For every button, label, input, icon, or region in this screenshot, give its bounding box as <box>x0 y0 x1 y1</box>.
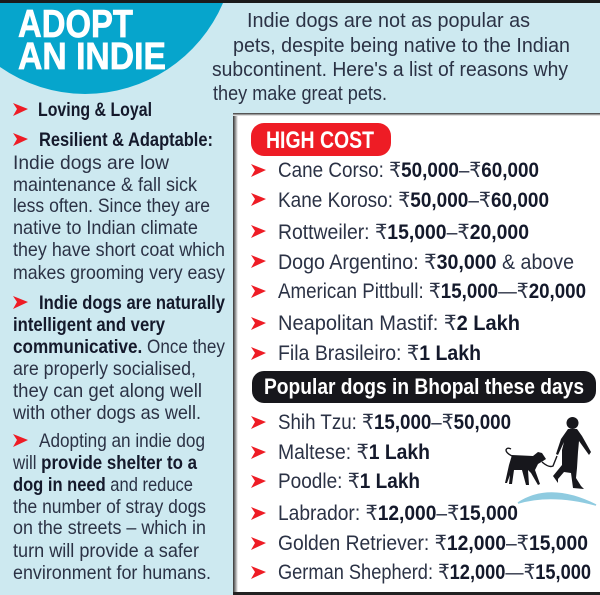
reason: shelter and safer streets: environment for humans. <box>13 562 211 584</box>
reason: intelligent and communicative: communicative. Once they <box>13 336 225 358</box>
intro text: Indie dogs are not as popular as <box>247 9 530 32</box>
reason: shelter and safer streets: the number of stray dogs <box>13 496 206 518</box>
item: american pittbull: American Pittbull: ₹15,000—₹20,000 <box>278 280 586 303</box>
reason: shelter and safer streets: dog in need and reduce <box>13 474 193 496</box>
item: golden retriever: Golden Retriever: ₹12,000–₹15,000 <box>278 532 588 555</box>
title badge: ADOPT <box>18 3 133 46</box>
title badge: AN INDIE <box>18 36 166 78</box>
reason: resilient and adaptable <box>13 129 225 284</box>
reason: loving and loyal: Loving & Loyal <box>38 99 152 121</box>
panel: dog prices <box>233 113 600 595</box>
reason: resilient and adaptable: less often. Since they are <box>13 195 210 217</box>
reason: shelter and safer streets: on the streets – which in <box>13 517 206 539</box>
reason: resilient and adaptable: they have short coat which <box>13 239 225 261</box>
item: shih tzu: Shih Tzu: ₹15,000–₹50,000 <box>278 411 511 434</box>
intro text: pets, despite being native to the Indian <box>233 34 570 57</box>
intro text: they make great pets. <box>213 82 387 105</box>
item: maltese: Maltese: ₹1 Lakh <box>278 441 430 464</box>
reason: loving and loyal <box>13 99 152 121</box>
item: fila brasileiro: Fila Brasileiro: ₹1 Lakh <box>278 342 481 365</box>
reason: resilient and adaptable: makes grooming very easy <box>13 262 225 284</box>
reason: intelligent and communicative: Indie dogs are naturally <box>39 292 225 314</box>
title badge <box>0 3 223 94</box>
reason: shelter and safer streets: Adopting an indie dog <box>39 430 205 452</box>
item: cane corso: Cane Corso: ₹50,000–₹60,000 <box>278 159 539 182</box>
heading: high cost <box>251 123 391 156</box>
item: rottweiler: Rottweiler: ₹15,000–₹20,000 <box>278 221 529 244</box>
item: poodle: Poodle: ₹1 Lakh <box>278 470 420 493</box>
reason: resilient and adaptable: Resilient & Adaptable: <box>39 129 213 151</box>
reason: resilient and adaptable: Indie dogs are low <box>13 152 170 174</box>
item: dogo argentino: Dogo Argentino: ₹30,000 & above <box>278 251 574 274</box>
reason: resilient and adaptable: maintenance & fall sick <box>13 174 197 196</box>
heading: high cost: HIGH COST <box>266 127 374 154</box>
reason: intelligent and communicative: intelligent and very <box>13 314 165 336</box>
reason: shelter and safer streets <box>12 430 211 584</box>
item: labrador: Labrador: ₹12,000–₹15,000 <box>278 502 518 525</box>
intro text: subcontinent. Here's a list of reasons why <box>212 58 569 81</box>
reason: intelligent and communicative <box>12 292 225 424</box>
intro text <box>212 9 570 105</box>
item: kane koroso: Kane Koroso: ₹50,000–₹60,000 <box>278 189 549 212</box>
reason: intelligent and communicative: are properly socialised, <box>13 358 196 380</box>
icon: person walking dog <box>505 417 596 505</box>
reason: resilient and adaptable: native to Indian climate <box>13 217 198 239</box>
reason: shelter and safer streets: turn will provide a safer <box>13 540 199 562</box>
reason: shelter and safer streets: will provide shelter to a <box>12 452 197 474</box>
item: german shepherd: German Shepherd: ₹12,000—₹15,000 <box>278 561 591 584</box>
item: neapolitan mastif: Neapolitan Mastif: ₹2 Lakh <box>278 312 520 335</box>
panel: reasons to adopt <box>12 99 225 584</box>
reason: intelligent and communicative: they can get along well <box>13 380 202 402</box>
reason: intelligent and communicative: with other dogs as well. <box>12 402 201 424</box>
